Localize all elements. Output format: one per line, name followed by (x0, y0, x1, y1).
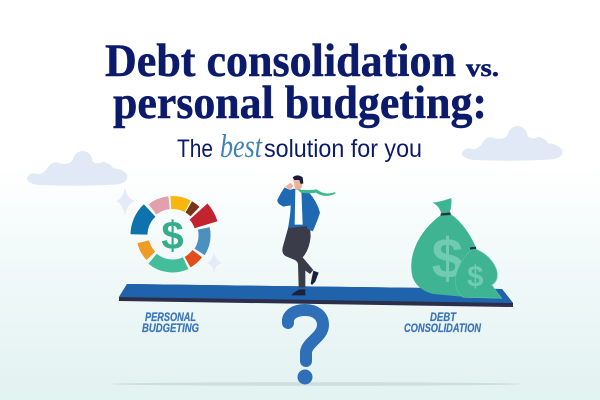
icon: sparkle large (116, 187, 135, 216)
title (105, 35, 499, 129)
cloud: left (27, 151, 127, 186)
subtitle: best (220, 129, 263, 165)
question mark (288, 310, 323, 384)
subtitle: The (177, 135, 213, 163)
shoes (291, 271, 319, 295)
subtitle: solution for you (264, 135, 422, 163)
icon: sparkle small (207, 252, 222, 273)
tie (297, 189, 335, 196)
subtitle (177, 129, 422, 165)
cloud: right (462, 126, 562, 161)
label: debt consolidation: CONSOLIDATION (404, 321, 481, 335)
title: Debt consolidation (105, 35, 456, 87)
small bag: $ (467, 261, 483, 294)
shirt (295, 190, 303, 225)
label: personal budgeting (142, 310, 199, 335)
donut budgeting chart (123, 186, 222, 284)
money bags (411, 198, 502, 298)
hair (293, 175, 303, 184)
head (285, 180, 303, 190)
large bag: $ (432, 228, 463, 291)
label: debt consolidation: DEBT (430, 310, 457, 324)
man thinking (277, 175, 335, 295)
ground shadow (111, 382, 521, 386)
label: personal budgeting: BUDGETING (142, 321, 199, 335)
seesaw plank (119, 284, 513, 307)
title: personal budgeting: (113, 77, 487, 129)
label: personal budgeting: PERSONAL (145, 310, 196, 324)
title: vs. (466, 55, 499, 82)
trousers (282, 225, 313, 287)
icon: dollar sign: $ (161, 214, 184, 258)
label: debt consolidation (404, 310, 481, 335)
jacket (277, 187, 320, 231)
